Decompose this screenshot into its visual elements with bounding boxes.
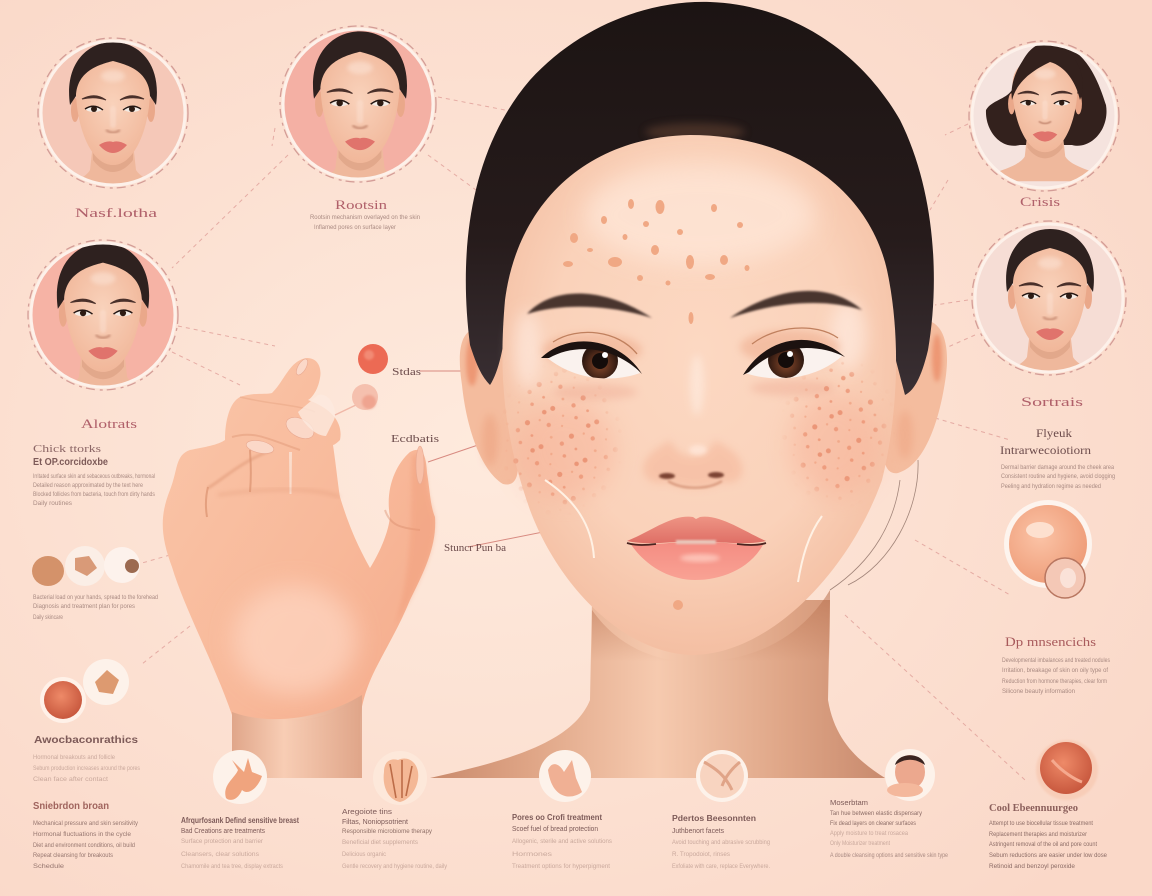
cheek blush <box>515 393 880 500</box>
right ear <box>884 320 947 473</box>
centre callouts <box>391 367 507 554</box>
text: left lower block <box>33 735 140 783</box>
text: bottom column 4: Scoef fuel of bread protection <box>512 826 598 833</box>
text: bottom column 1: Sniebrdon broan <box>33 801 109 812</box>
main illustration: woman's face <box>430 2 947 778</box>
portrait: top left <box>33 38 193 198</box>
text: bottom column 2: Chamomile and tea tree, display extracts <box>181 864 283 870</box>
text: bottom column 3: Gentle recovery and hygiene routine, daily <box>342 864 447 870</box>
text: bottom column 6: Apply moisture to treat rosacea <box>830 831 909 837</box>
text: dp mnsencichs block: Reduction from hormone therapies, clear form <box>1002 679 1107 685</box>
text: bottom column 5: Juthbenort facets <box>672 828 724 835</box>
cheek strands <box>545 480 822 582</box>
cheek freckles <box>508 362 886 504</box>
text: left lower block: Sebum production increases around the pores <box>33 766 140 772</box>
section labels: Rootsin <box>335 197 388 212</box>
portrait: middle left <box>27 239 179 391</box>
text: bottom column 1: Diet and environment conditions, oil build <box>33 843 135 849</box>
centre callouts: Ecdbatis <box>391 434 439 445</box>
text: left lower block: Hormonal breakouts and follicle <box>33 755 116 761</box>
icon: bottom circle 1 <box>213 750 267 804</box>
text: chick ttorks: Chick ttorks <box>33 443 101 455</box>
thumb shading <box>395 455 435 625</box>
text: bottom column 6: Only Moisturizer treatment <box>830 841 890 847</box>
hair <box>466 2 934 395</box>
text: bottom column 2: Bad Creations are treatments <box>181 828 265 835</box>
text: bottom column 2: Surface protection and barrier <box>181 839 263 845</box>
text: left lower block: Awocbaconrathics <box>34 735 139 746</box>
text: flyeuk block: Dermal barrier damage around the cheek area <box>1001 465 1115 471</box>
icons: left trio <box>32 546 140 586</box>
face shape <box>502 135 896 655</box>
left eye <box>541 332 642 400</box>
portrait: top right <box>969 41 1119 191</box>
palm highlight <box>233 585 357 695</box>
icon: bottom circle 4 <box>696 750 748 802</box>
text: chick ttorks: Irritated surface skin and sebaceous outbreaks, hormonal <box>33 474 155 480</box>
text: bottom column 2 <box>181 816 299 870</box>
text: rootsin <box>310 215 420 231</box>
neck and shoulders <box>430 590 885 778</box>
text: chick ttorks: Daily routines <box>33 501 72 507</box>
wrist fade <box>232 695 362 778</box>
text: flyeuk block <box>1000 426 1115 490</box>
text: bottom column 6 <box>830 800 949 859</box>
text: bottom column 4 <box>512 813 612 870</box>
text: bottom column 3: Delicious organic <box>342 852 386 858</box>
lips <box>627 517 766 580</box>
centre callouts: Stuncr Pun ba <box>444 543 507 554</box>
text: flyeuk block: Peeling and hydration regime as needed <box>1001 484 1101 490</box>
text: chick ttorks: Blocked follicles from bacteria, touch from dirty hands <box>33 492 155 498</box>
section labels: Crisis <box>1020 194 1060 209</box>
text: bottom column 6: A double cleansing options and sensitive skin type <box>830 853 949 859</box>
icon: bottom circle 6 <box>1036 740 1098 800</box>
text: left trio caption: Diagnosis and treatment plan for pores <box>33 604 135 610</box>
eyebrows <box>527 291 862 318</box>
text: bottom column 1: Mechanical pressure and skin sensitivity <box>33 821 138 827</box>
text: bottom column 5: Exfoliate with care, replace Everywhere. <box>672 864 770 870</box>
text: bottom column 6: Tan hue between elastic dispensary <box>830 811 922 817</box>
text: bottom column 3: Filtas, Noniopsotrient <box>342 819 408 826</box>
text: chick ttorks: Et OP.corcidoxbe <box>33 457 108 468</box>
text: bottom column 6: Moserbtam <box>830 800 868 807</box>
finger gap <box>289 452 292 494</box>
icon: skin sample right <box>1004 500 1092 598</box>
temple highlights <box>514 300 866 390</box>
centre callouts: Stdas <box>392 367 421 378</box>
text: flyeuk block: Intrarwecoiotiorn <box>1000 443 1091 457</box>
section labels: Alotrats <box>81 416 137 431</box>
text: bottom column 1: Repeat cleansing for breakouts <box>33 853 113 859</box>
text: bottom column 4: Hormones <box>512 852 552 858</box>
text: bottom column 7: Sebum reductions are easier under low dose <box>989 853 1108 859</box>
text: bottom column 3: Beneficial diet supplements <box>342 840 418 846</box>
text: bottom column 4: Allogenic, sterile and active solutions <box>512 839 612 845</box>
text: bottom column 5 <box>672 814 770 870</box>
text: bottom column 2: Cleansers, clear solutions <box>181 852 259 858</box>
dashed connector lines <box>142 97 1025 780</box>
text: bottom column 4: Pores oo Crofi treatment <box>512 813 602 822</box>
icon: bottom circle 2 <box>373 751 427 805</box>
icons: left pair <box>40 659 129 723</box>
text: chick ttorks <box>33 443 155 507</box>
section labels <box>75 194 1083 431</box>
text: bottom column 7 <box>989 803 1108 870</box>
portrait: middle right <box>970 221 1130 385</box>
text: dp mnsencichs block: Silicone beauty information <box>1002 689 1075 695</box>
text: bottom column 5: Avoid touching and abrasive scrubbing <box>672 840 770 846</box>
forehead highlight <box>585 165 815 265</box>
finger nails <box>245 357 424 484</box>
text: bottom column 1 <box>33 801 138 870</box>
nose <box>643 355 743 488</box>
icon: bottom circle 3 <box>539 750 591 802</box>
text: rootsin: Rootsin mechanism overlayed on the skin <box>310 215 420 221</box>
text: bottom column 5: R. Tropodoiot, rinses <box>672 852 730 858</box>
text: bottom column 3: Aregoiote tins <box>342 809 393 816</box>
held pimple patch <box>298 395 335 436</box>
text: left lower block: Clean face after contact <box>33 777 108 783</box>
left ear <box>460 328 518 485</box>
text: bottom column 1: Schedule <box>33 864 65 870</box>
text: rootsin: Inflamed pores on surface layer <box>314 225 396 231</box>
text: bottom column 1: Hormonal fluctuations in the cycle <box>33 832 132 838</box>
text: bottom column 7: Astringent removal of the oil and pore count <box>989 842 1097 848</box>
text: flyeuk block: Flyeuk <box>1036 426 1072 440</box>
section labels: Sortrais <box>1021 394 1083 409</box>
text: left trio caption <box>33 595 158 621</box>
text: left trio caption: Bacterial load on your hands, spread to the forehead <box>33 595 158 601</box>
portrait: top centre <box>279 25 437 183</box>
text: dp mnsencichs block: Developmental imbalances and treated nodules <box>1002 658 1110 664</box>
text: bottom column 7: Replacement therapies and moisturizer <box>989 832 1087 838</box>
text: bottom column 5: Pdertos Beesonnten <box>672 814 756 823</box>
text: bottom column 7: Attempt to use biocellular tissue treatment <box>989 821 1093 827</box>
text: bottom column 7: Retinoid and benzoyl peroxide <box>989 864 1076 870</box>
text: bottom column 3 <box>342 809 447 870</box>
text: bottom column 6: Fix dead layers on cleaner surfaces <box>830 821 916 827</box>
text: bottom column 4: Treatment options for hyperpigment <box>512 864 610 870</box>
section labels: Nasf.lotha <box>75 205 157 220</box>
loose hair strands <box>830 460 918 590</box>
text: chick ttorks: Detailed reason approximated by the text here <box>33 483 144 489</box>
icon: bottom circle 5 <box>885 749 935 801</box>
swatch: red and pale dots <box>335 344 388 415</box>
hand silhouette <box>163 358 435 778</box>
illustration: hand <box>163 357 435 778</box>
forehead spots <box>563 199 750 610</box>
text: flyeuk block: Consistent routine and hygiene, avoid clogging <box>1001 474 1115 480</box>
text: dp mnsencichs block: Dp mnsencichs <box>1005 634 1096 649</box>
text: left trio caption: Daily skincare <box>33 615 64 621</box>
text: bottom column 2: Afrqurfosank Defind sensitive breast <box>181 816 299 825</box>
text: bottom column 3: Responsible microbiome therapy <box>342 829 432 835</box>
finger shadows <box>206 397 420 530</box>
right eye <box>740 328 845 396</box>
text: dp mnsencichs block <box>1002 634 1110 695</box>
text: bottom column 7: Cool Ebeennuurgeo <box>989 803 1078 814</box>
text: dp mnsencichs block: Irritation, breakage of skin on oily type of <box>1002 668 1108 674</box>
